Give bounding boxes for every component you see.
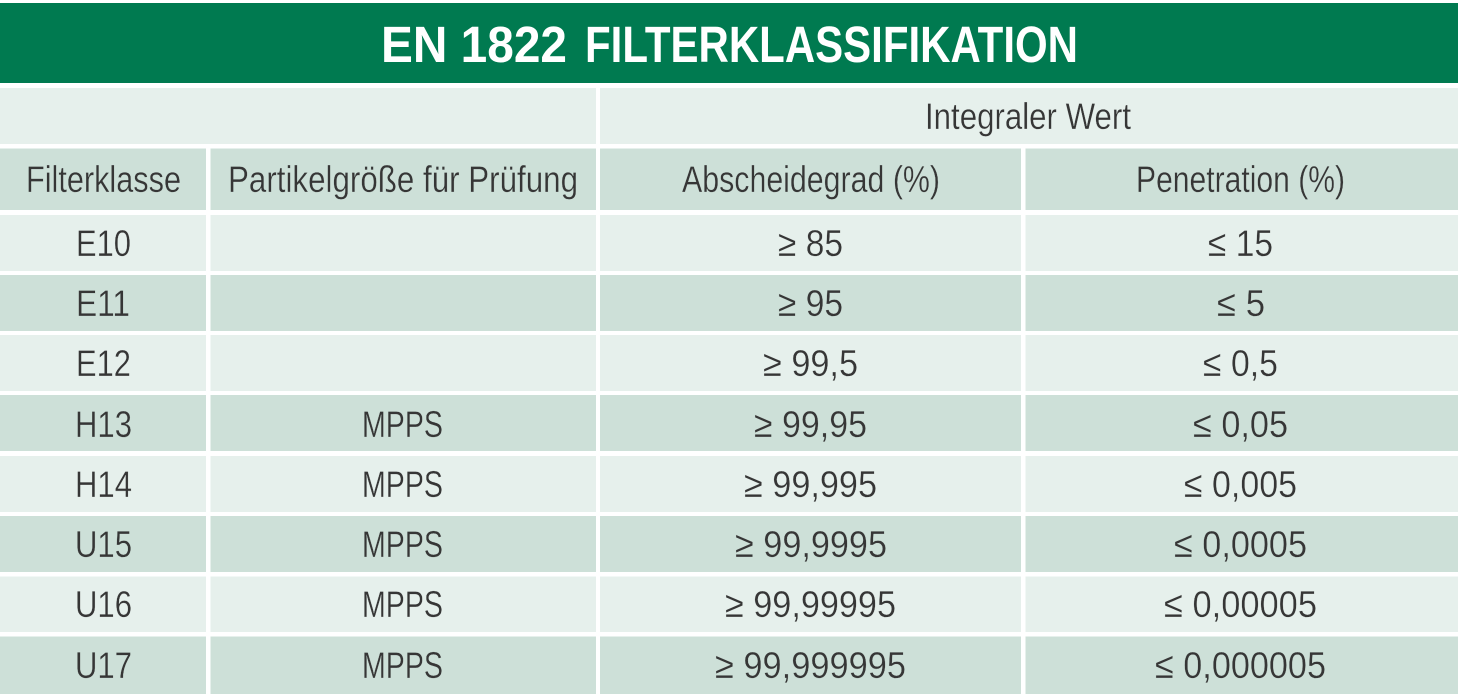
row E10: E10 [76, 223, 131, 264]
column header row: Penetration (%) [1136, 159, 1345, 200]
row H13: ≥ 99,95 [754, 404, 867, 445]
row U15: U15 [75, 524, 132, 565]
row U15: ≥ 99,9995 [735, 524, 887, 565]
row U15: ≤ 0,0005 [1174, 524, 1307, 565]
row E10: ≤ 15 [1208, 223, 1273, 264]
row H13: ≤ 0,05 [1193, 404, 1288, 445]
row U17: MPPS [362, 645, 443, 686]
row H14: MPPS [362, 464, 443, 505]
row H13 [0, 395, 1458, 451]
row U15: MPPS [362, 524, 443, 565]
row U16: MPPS [362, 584, 443, 625]
row H14: ≥ 99,995 [744, 464, 877, 505]
row E11: E11 [76, 283, 130, 324]
title banner: FILTERKLASSIFIKATION [585, 16, 1078, 73]
row U16: ≥ 99,99995 [725, 584, 896, 625]
row U17 [0, 636, 1458, 694]
row E11: ≤ 5 [1217, 283, 1265, 324]
row U17: ≥ 99,999995 [715, 645, 906, 686]
row U16: U16 [75, 584, 132, 625]
column header row [0, 148, 1458, 210]
row U16 [0, 576, 1458, 632]
row E10 [0, 215, 1458, 271]
row E10: ≥ 85 [778, 223, 843, 264]
group header row: Integraler Wert: Integraler Wert [925, 96, 1132, 137]
row E12: ≥ 99,5 [763, 343, 858, 384]
row H14: ≤ 0,005 [1184, 464, 1297, 505]
title banner: EN 1822 [381, 16, 567, 73]
row E11: ≥ 95 [778, 283, 843, 324]
row E12: E12 [76, 343, 131, 384]
column header row: Partikelgröße für Prüfung [228, 159, 578, 200]
row H13: MPPS [362, 404, 443, 445]
row E12 [0, 335, 1458, 391]
row U17: U17 [75, 645, 132, 686]
row U15 [0, 516, 1458, 572]
column header row: Abscheidegrad (%) [682, 159, 940, 200]
row E11 [0, 275, 1458, 331]
row E12: ≤ 0,5 [1203, 343, 1278, 384]
group header row: Integraler Wert [0, 88, 1458, 144]
row U16: ≤ 0,00005 [1164, 584, 1317, 625]
title banner [0, 3, 1458, 83]
column header row: Filterklasse [26, 159, 181, 200]
row H14 [0, 456, 1458, 512]
row U17: ≤ 0,000005 [1155, 645, 1326, 686]
row H13: H13 [75, 404, 132, 445]
row H14: H14 [75, 464, 132, 505]
